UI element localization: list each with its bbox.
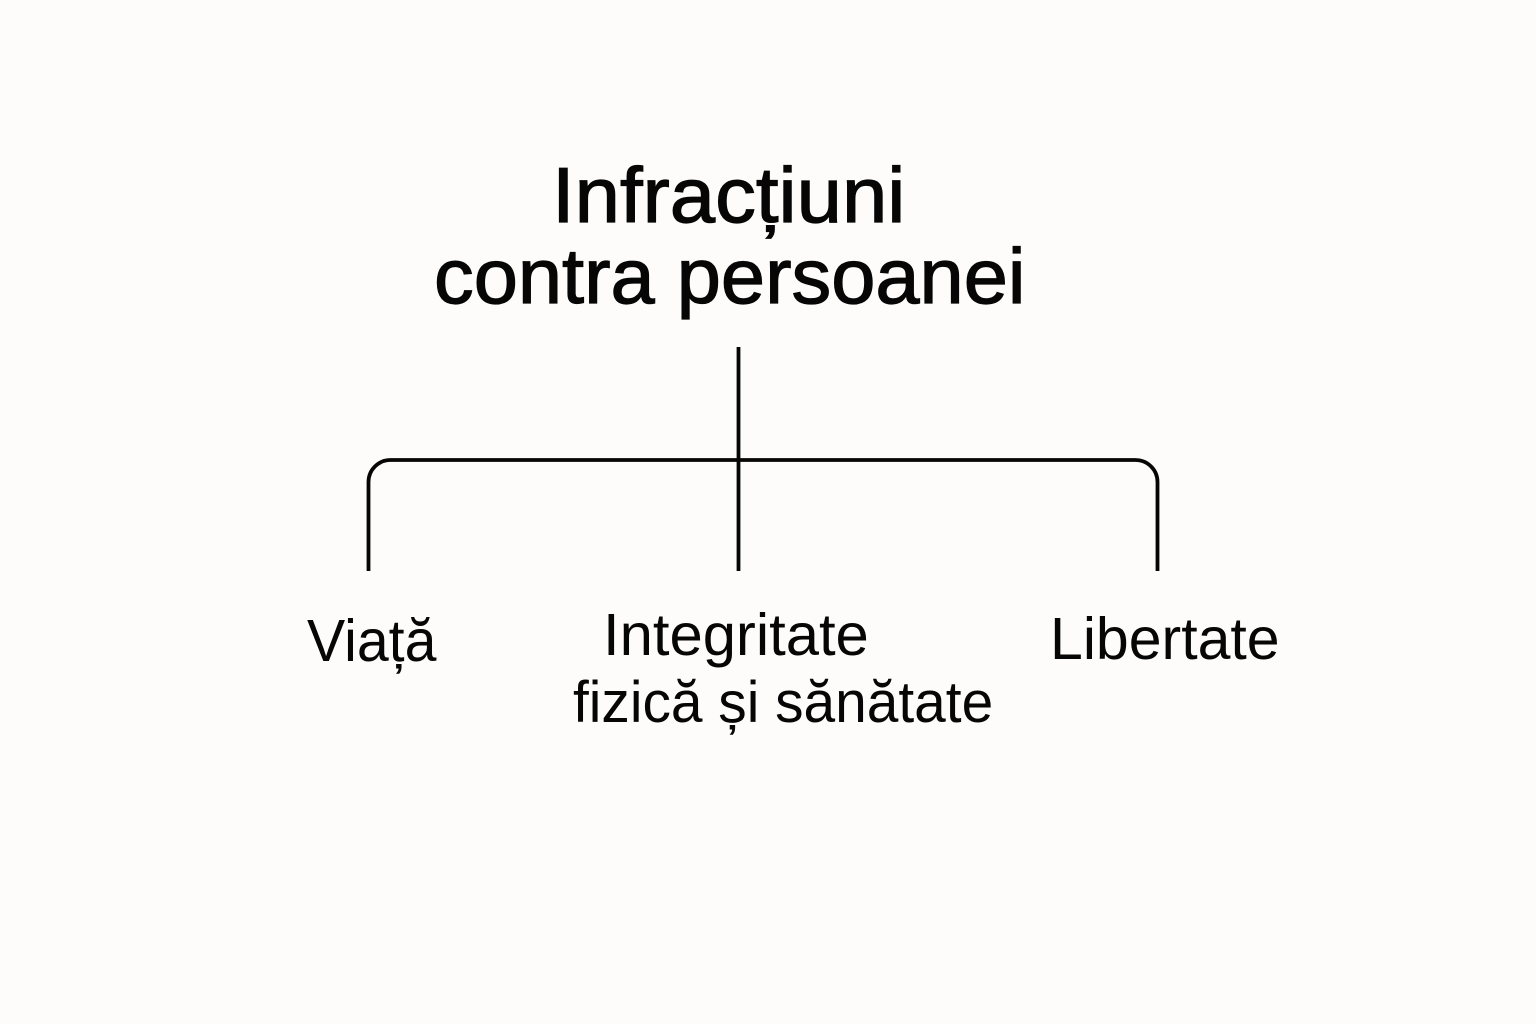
title: Infracțiuni [552, 151, 905, 239]
label: Libertate: Libertate [1050, 606, 1280, 672]
title [434, 151, 1026, 320]
label: Integritate fizică și sănătate [573, 602, 993, 735]
label: Viață: Viață [307, 608, 436, 674]
label: Integritate fizică și sănătate: fizică și sănătate [573, 670, 993, 735]
title: contra persoanei [434, 232, 1026, 320]
label: Integritate fizică și sănătate: Integritate [603, 602, 869, 668]
